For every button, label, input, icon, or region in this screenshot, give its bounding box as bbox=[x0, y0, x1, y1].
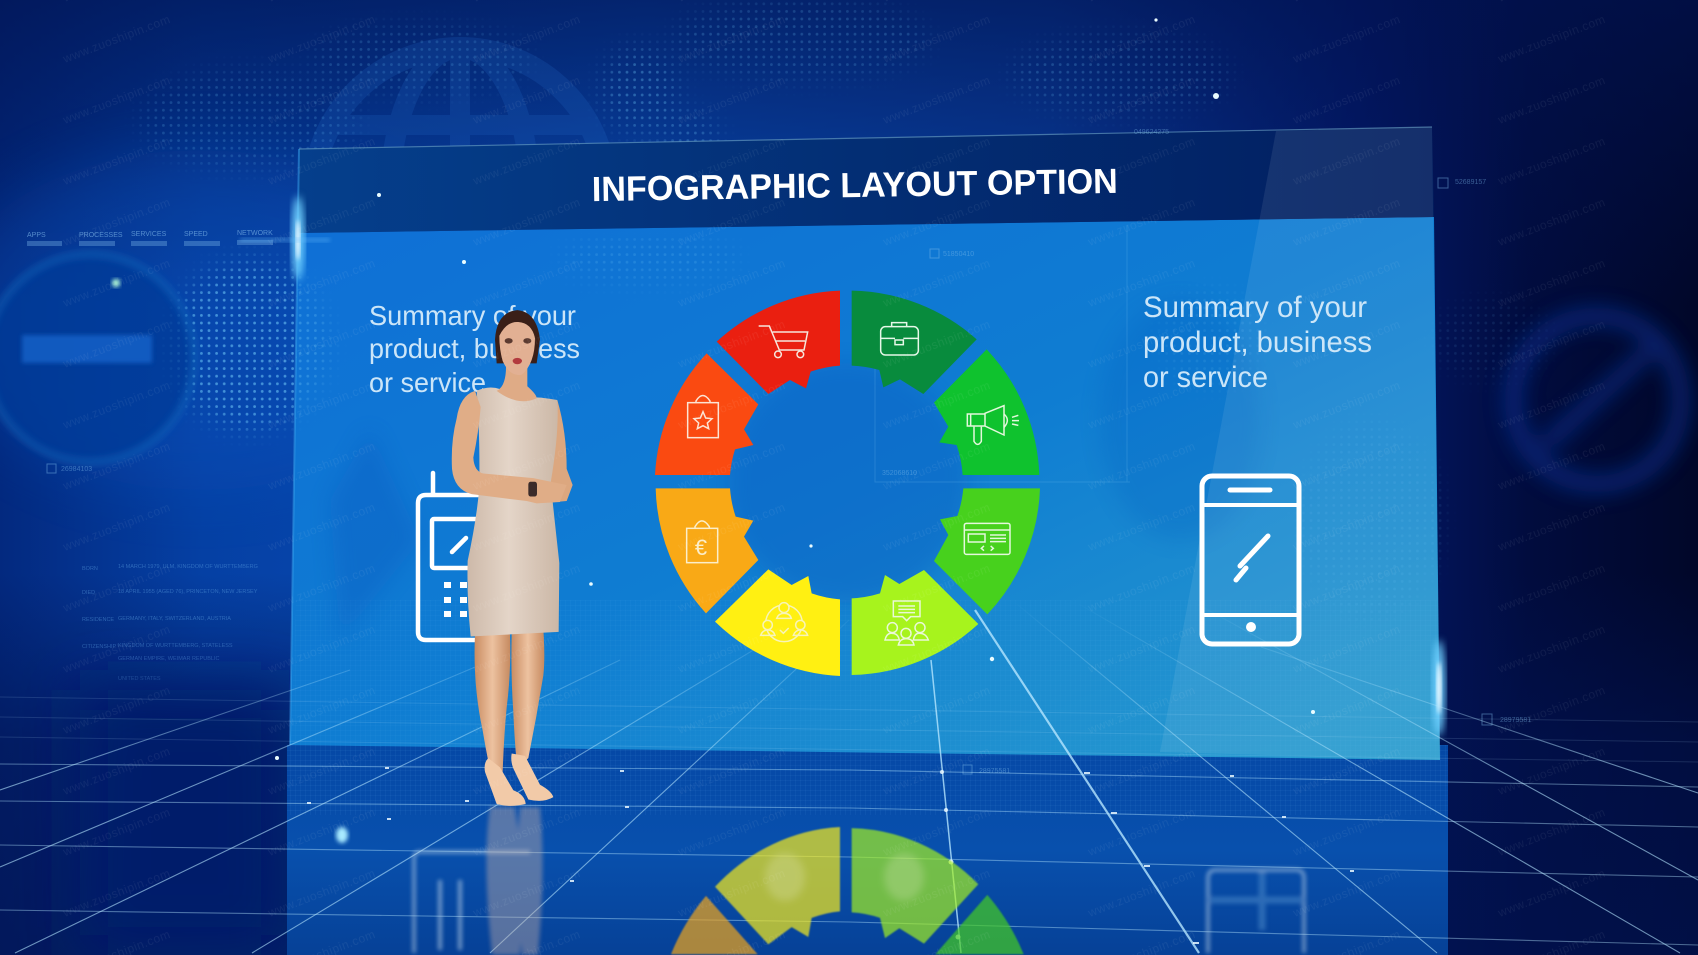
floor base bbox=[80, 690, 1448, 955]
small data marks in panel: 28975581 bbox=[979, 768, 1010, 775]
right edge flare bbox=[1433, 640, 1445, 736]
neck and chest bbox=[497, 363, 537, 401]
segment: euro bag: € bbox=[695, 535, 707, 560]
bright particles bbox=[275, 18, 1315, 760]
status labels left: SERVICES bbox=[131, 231, 167, 238]
faint data text left: 18 APRIL 1955 (AGED 76), PRINCETON, NEW JERSEY bbox=[118, 589, 258, 595]
small data marks in panel bbox=[47, 129, 1531, 775]
left phone icon bbox=[418, 473, 505, 640]
presenter bbox=[452, 310, 573, 806]
reflected yellow segment bbox=[715, 827, 840, 944]
dress bbox=[467, 388, 559, 636]
panel dotted map bbox=[298, 238, 1426, 566]
faint data text left: CITIZENSHIP bbox=[82, 644, 117, 650]
status labels left: NETWORK bbox=[237, 230, 273, 237]
floor reflection of ring bbox=[671, 827, 1024, 954]
small data marks in panel: 352068610 bbox=[882, 470, 917, 477]
small data marks in panel: 51850410 bbox=[943, 251, 974, 258]
floor grid lines bbox=[0, 600, 1698, 953]
segment: megaphone bbox=[934, 349, 1039, 475]
legs bbox=[475, 630, 544, 772]
ghost globe icon bbox=[313, 48, 607, 342]
segment: briefcase bbox=[852, 291, 977, 394]
panel grid texture bbox=[290, 600, 1440, 760]
faint data text left: RESIDENCE bbox=[82, 617, 114, 623]
left summary text: product, business bbox=[369, 333, 580, 364]
left summary text bbox=[369, 300, 580, 398]
dotted world map bbox=[140, 2, 1540, 560]
panel light sweep bbox=[1160, 127, 1440, 760]
faint data text left: KINGDOM OF WURTTEMBERG, STATELESS bbox=[118, 643, 233, 649]
head bbox=[495, 310, 540, 375]
left summary text: Summary of your bbox=[369, 300, 576, 331]
faint data text left: GERMANY, ITALY, SWITZERLAND, AUSTRIA bbox=[118, 616, 231, 622]
segment: team circle bbox=[715, 569, 840, 676]
lens glow dot bbox=[336, 827, 348, 843]
panel left edge bbox=[290, 149, 299, 745]
title band bbox=[298, 127, 1434, 233]
status labels left: APPS bbox=[27, 232, 46, 239]
segment: web browser bbox=[934, 488, 1040, 614]
panel darker vignette shapes bbox=[330, 300, 1260, 640]
right summary text bbox=[1143, 291, 1372, 394]
right summary text: product, business bbox=[1143, 326, 1372, 359]
small data marks in panel: 26984103 bbox=[61, 466, 92, 473]
floor reflection of presenter bbox=[486, 807, 543, 955]
left round sign bbox=[0, 254, 194, 462]
far arm bbox=[540, 400, 573, 503]
reflected orange segment bbox=[671, 896, 758, 954]
small data marks in panel: 28979581 bbox=[1500, 717, 1531, 724]
segment: star bag bbox=[655, 353, 758, 475]
panel top edge bbox=[299, 127, 1432, 149]
floor grid markers bbox=[307, 767, 1354, 944]
small data marks in panel: 049624275 bbox=[1134, 129, 1169, 136]
title: INFOGRAPHIC LAYOUT OPTION bbox=[592, 162, 1118, 209]
circle data lines bbox=[875, 225, 1130, 482]
faint data text left bbox=[82, 564, 258, 682]
right phone icon bbox=[1202, 476, 1299, 644]
status labels left: SPEED bbox=[184, 231, 208, 238]
wristwatch bbox=[528, 482, 537, 496]
reflected lime segment bbox=[852, 828, 978, 944]
faint data text left: GERMAN EMPIRE, WEIMAR REPUBLIC bbox=[118, 656, 219, 662]
floor reflection of phones bbox=[414, 852, 1304, 953]
status labels left bbox=[27, 230, 273, 246]
faint data text left: DIED bbox=[82, 590, 95, 596]
right summary text: Summary of your bbox=[1143, 291, 1367, 324]
right round sign bbox=[1513, 316, 1681, 484]
left summary text: or service bbox=[369, 367, 486, 398]
segment: euro bag bbox=[656, 488, 758, 613]
screen panel bbox=[290, 217, 1440, 760]
right summary text: or service bbox=[1143, 361, 1268, 394]
segment: team chat bbox=[852, 570, 978, 675]
small data marks in panel: 52689157 bbox=[1455, 179, 1486, 186]
faint data text left: UNITED STATES bbox=[118, 676, 161, 682]
shoes bbox=[485, 754, 553, 806]
near arm bbox=[452, 391, 567, 503]
reflected icon smears bbox=[765, 853, 924, 901]
faint data text left: 14 MARCH 1979, ULM, KINGDOM OF WURTTEMBERG bbox=[118, 564, 258, 570]
segmented ring chart bbox=[655, 291, 1040, 676]
left edge flare bbox=[240, 196, 330, 280]
faint data text left: BORN bbox=[82, 566, 98, 572]
status labels left: PROCESSES bbox=[79, 232, 123, 239]
segment: shopping cart bbox=[717, 291, 840, 394]
reflected green segment bbox=[935, 895, 1024, 954]
